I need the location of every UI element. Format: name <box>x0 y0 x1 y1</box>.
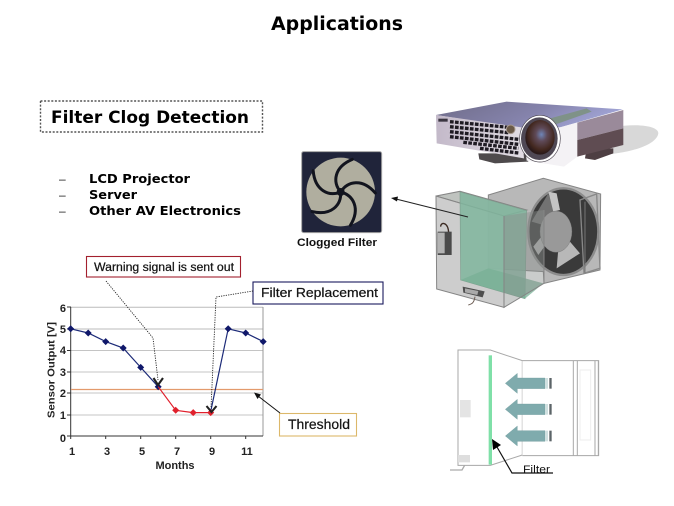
label: filter: Filter <box>523 464 550 476</box>
front housing <box>436 191 527 216</box>
heading: Filter Clog Detection <box>40 101 262 132</box>
housing outline <box>458 350 599 465</box>
arrow: clogged filter pointer <box>391 196 468 217</box>
x axis title: Months <box>155 460 195 472</box>
line chart: sensor output over months <box>46 303 267 472</box>
red data series <box>158 387 214 416</box>
y axis labels: 3 <box>60 367 66 379</box>
sensor: bottom <box>463 287 485 305</box>
x axis labels: 1 <box>69 446 75 458</box>
callout: filter replacement: Filter Replacement <box>261 285 378 300</box>
arrow: filter replacement to month 9 <box>206 291 253 412</box>
callout: threshold: Threshold <box>288 417 350 432</box>
green filter panel <box>460 192 527 299</box>
arrow: warning to month 6 <box>106 281 163 385</box>
airflow arrow 2 <box>505 399 552 419</box>
x axis labels: 11 <box>241 446 253 458</box>
airflow arrow 1 <box>505 373 552 393</box>
application list: Server <box>89 187 138 202</box>
x axis labels: 3 <box>104 446 110 458</box>
y axis title: Sensor Output [V] <box>46 322 58 418</box>
green filter <box>489 355 492 465</box>
y axis labels: 4 <box>60 345 67 357</box>
heading: Filter Clog Detection: Filter Clog Detection <box>51 108 249 127</box>
fan <box>528 188 600 275</box>
y axis labels: 5 <box>60 324 66 336</box>
x axis labels <box>69 446 253 458</box>
arrow: threshold <box>254 392 280 413</box>
application list: LCD Projector <box>89 171 191 186</box>
sensor: side <box>438 223 452 255</box>
application list <box>59 171 241 218</box>
x axis labels: 5 <box>139 446 145 458</box>
image: filter and fan assembly <box>436 178 601 307</box>
callout: filter replacement <box>253 282 383 304</box>
airflow arrow 3 <box>505 426 552 446</box>
callout: threshold <box>280 414 356 436</box>
image: LCD projector <box>436 102 658 167</box>
arrow: filter pointer <box>492 439 553 473</box>
y axis labels: 6 <box>60 303 66 315</box>
image: clogged filter <box>302 152 382 233</box>
label: clogged filter: Clogged Filter <box>297 237 378 249</box>
y axis labels <box>60 303 67 445</box>
callout: warning signal <box>86 256 240 277</box>
application list: – <box>59 204 66 218</box>
x axis labels: 7 <box>174 446 180 458</box>
threshold line <box>71 388 263 390</box>
y axis labels: 0 <box>60 433 66 445</box>
application list: – <box>59 172 66 186</box>
blue data series <box>67 325 267 410</box>
application list: – <box>59 188 66 202</box>
callout: warning signal: Warning signal is sent out <box>94 262 235 274</box>
projector shadow <box>600 125 658 155</box>
application list: Other AV Electronics <box>89 203 241 218</box>
diagram: airflow through filter <box>450 350 599 470</box>
x axis labels: 9 <box>209 446 215 458</box>
back housing <box>488 178 601 283</box>
title: Applications <box>271 14 403 35</box>
y axis labels: 1 <box>60 410 66 422</box>
y axis labels: 2 <box>60 388 66 400</box>
